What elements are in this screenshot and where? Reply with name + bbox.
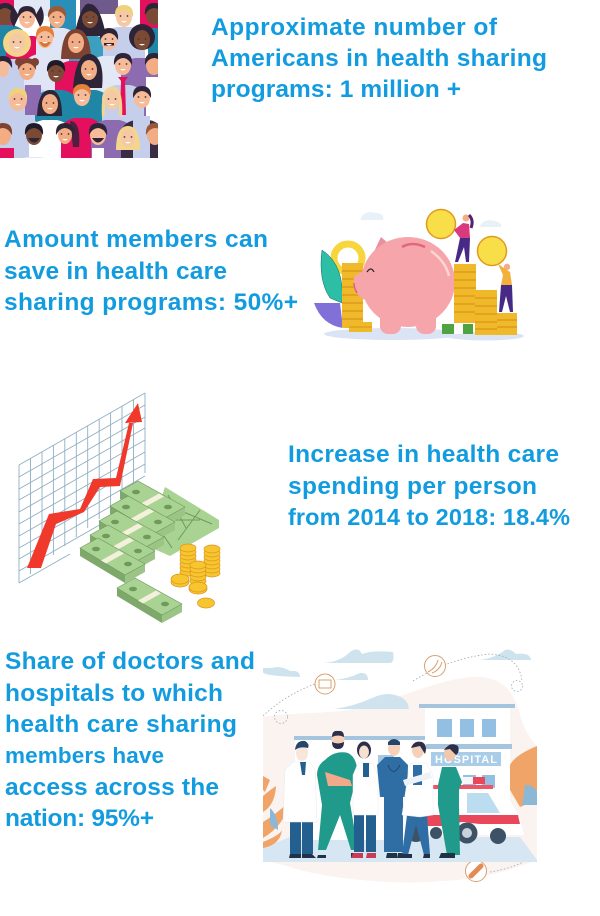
hospital building: HOSPITAL	[435, 754, 497, 766]
text: amount members can save	[4, 226, 298, 316]
text: increase in spending: Increase in health care	[288, 441, 559, 468]
icon: gear	[334, 244, 362, 272]
illustration: crowd of people	[0, 0, 158, 158]
coin stack: left	[342, 263, 372, 332]
person lifting coin: man	[498, 264, 513, 312]
text: number of Americans	[211, 14, 547, 103]
text: share of doctors and hospitals: Share of doctors and	[5, 648, 255, 675]
icon: teal leaf	[321, 250, 342, 303]
text: increase in spending: from 2014 to 2018: 18.4%	[288, 504, 570, 530]
ground	[263, 837, 537, 862]
illustration: rising chart with money and coins	[19, 393, 220, 623]
text: share of doctors and hospitals	[5, 648, 255, 832]
text: share of doctors and hospitals: nation: 95%+	[5, 805, 154, 832]
chart grid	[19, 393, 145, 583]
ambulance	[407, 777, 524, 844]
hospital building	[419, 704, 515, 800]
doctor in white coat with tie	[283, 741, 317, 858]
text: share of doctors and hospitals: members have	[5, 743, 164, 768]
text: share of doctors and hospitals: hospitals to which	[5, 680, 223, 707]
woman doctor	[351, 742, 378, 858]
pig ears and legs	[372, 237, 397, 256]
text: amount members can save: Amount members can	[4, 226, 268, 253]
text: number of Americans: Approximate number of	[211, 14, 498, 41]
piggy bank body	[361, 237, 455, 327]
low wing building	[294, 736, 426, 840]
gold coins	[171, 544, 220, 608]
icon: first aid kit	[315, 674, 335, 694]
text: increase in spending	[288, 441, 570, 530]
orange leaf right	[510, 746, 537, 807]
text: number of Americans: programs: 1 million +	[211, 76, 461, 103]
dotted paths	[263, 654, 530, 872]
text: share of doctors and hospitals: health care sharing	[5, 711, 237, 738]
stack of green bills	[80, 481, 219, 583]
person lifting coin: woman	[454, 214, 472, 262]
clouds	[263, 649, 531, 709]
text: number of Americans: Americans in health sharing	[211, 45, 547, 72]
illustration: hospital and medical staff	[263, 649, 537, 882]
woman in white coat with crossed arms	[401, 742, 433, 858]
text: amount members can save: sharing programs: 50%+	[4, 289, 298, 316]
nurse in green scrubs	[438, 744, 462, 858]
big coins	[426, 210, 506, 266]
icon: dna	[424, 656, 446, 676]
red trend arrow	[27, 423, 133, 568]
coin stacks: right	[442, 264, 517, 335]
male nurse in green scrubs	[317, 730, 356, 858]
illustration: piggy bank and coins	[314, 210, 524, 340]
icon: pill	[466, 860, 486, 882]
text: amount members can save: save in health care	[4, 258, 227, 285]
orange leaves left	[263, 776, 284, 848]
background blob	[263, 677, 537, 882]
single bundle of bills	[117, 578, 182, 623]
text: increase in spending: spending per person	[288, 473, 537, 500]
text: share of doctors and hospitals: access across the	[5, 774, 219, 801]
icon: purple leaf	[314, 303, 343, 328]
doctor in blue scrubs	[377, 739, 408, 858]
